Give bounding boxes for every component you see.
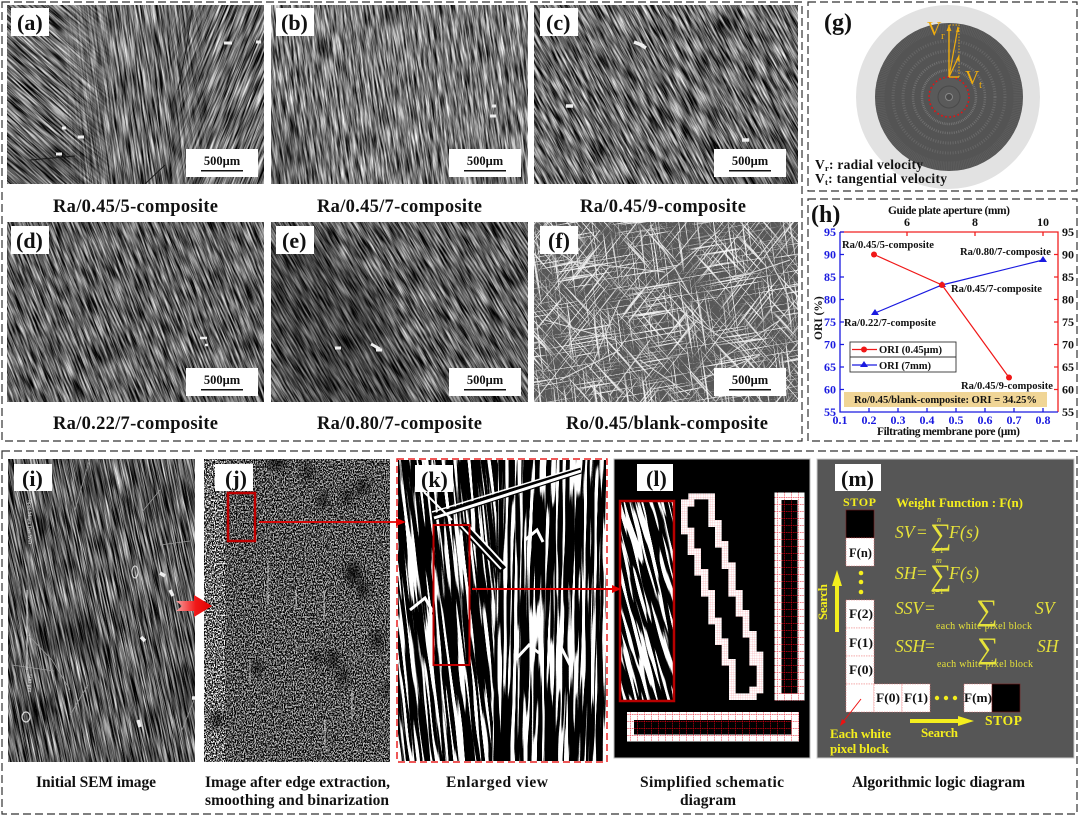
caption (k): Enlarged view — [446, 774, 549, 791]
text: horizontal search: Search — [921, 725, 959, 740]
scale bar (e): 500μm — [467, 373, 504, 387]
equation SV — [895, 515, 979, 555]
horizontal cell row: F(1) — [904, 690, 928, 705]
pixel schematic: vertical fibre — [774, 492, 804, 700]
label (c) — [540, 8, 578, 36]
label (k) — [415, 465, 453, 492]
label (d): (d) — [16, 228, 43, 253]
right axis ticks: 55 — [1062, 405, 1074, 419]
label (c): (c) — [546, 10, 570, 35]
vertical cell stack: F(1) — [849, 635, 873, 650]
caption (l): Simplified schematic — [640, 774, 784, 791]
scale bar (a) — [186, 149, 258, 177]
equation SV: n — [937, 515, 941, 524]
caption (d): Ra/0.22/7-composite — [53, 414, 218, 434]
panel: (g) velocity schematic — [808, 2, 1077, 191]
bottom axis ticks: 0.7 — [1006, 413, 1022, 427]
equation SH: F ( s ) — [948, 563, 979, 583]
label (l) — [637, 464, 673, 491]
label (h): (h) — [811, 202, 840, 228]
scale bar (a): 500μm — [204, 154, 241, 168]
scale bar (c) — [714, 149, 786, 177]
right axis ticks: 80 — [1062, 292, 1074, 306]
caption (c): Ra/0.45/9-composite — [580, 197, 746, 217]
data labels: Ra/0.22/7-composite — [844, 318, 936, 329]
equation SV: SV — [895, 522, 917, 542]
left axis ticks: 60 — [824, 382, 836, 396]
equation SH: m — [936, 556, 942, 565]
caption (m): Algorithmic logic diagram — [852, 774, 1025, 791]
equation SSH: = — [925, 636, 935, 656]
outer light disc — [856, 5, 1040, 189]
equation SV: F ( s ) — [948, 522, 979, 542]
left axis ticks: 65 — [824, 360, 836, 374]
arrow: (k) to (l) — [472, 585, 621, 593]
caption (a): Ra/0.45/5-composite — [53, 197, 218, 217]
left axis ticks: 95 — [824, 225, 836, 239]
bottom axis ticks: 0.2 — [862, 413, 876, 427]
vertical cell stack — [846, 510, 874, 684]
callout: blank composite ORI: Ro/0.45/blank-composite: ORI = 34.25% — [854, 395, 1037, 406]
vertical cell stack: F(2) — [849, 606, 873, 621]
panel: top SEM image group border — [2, 2, 802, 441]
pixel schematic: horizontal fibre — [627, 712, 799, 742]
legend text: : tangential velocity — [828, 171, 947, 186]
caption (j): smoothing and binarization — [205, 792, 389, 809]
caption (l): diagram — [680, 792, 736, 809]
panel: (i) initial SEM image — [8, 459, 195, 762]
label (a) — [11, 8, 49, 36]
right axis ticks: 70 — [1062, 338, 1074, 352]
scale bar (e) — [449, 368, 521, 396]
label (m): (m) — [841, 466, 874, 491]
label (i) — [14, 464, 52, 491]
bottom axis ticks: 0.8 — [1036, 413, 1050, 427]
label Vr: r — [941, 30, 945, 42]
velocity arrows — [946, 25, 960, 77]
pointer arrow — [840, 699, 861, 726]
bottom axis ticks — [832, 413, 1050, 427]
top axis ticks: 8 — [972, 215, 978, 229]
red selection box — [228, 493, 255, 541]
vertical cell stack: F(0) — [849, 662, 873, 677]
equation SSV — [895, 594, 1057, 632]
text: vertical search: Search — [815, 583, 830, 620]
top STOP: STOP — [843, 495, 876, 509]
scale bar (c): 500μm — [732, 154, 769, 168]
right axis ticks: 65 — [1062, 360, 1074, 374]
caption (b): Ra/0.45/7-composite — [317, 197, 482, 217]
text: each white pixel block — [830, 726, 891, 756]
horizontal cell row: F(0) — [876, 690, 900, 705]
label (i): (i) — [22, 466, 43, 491]
arrow: (i) to (j) — [176, 595, 212, 617]
text: each white pixel block: pixel block — [830, 741, 890, 756]
arrow: vertical search — [832, 570, 842, 632]
horizontal cell row — [846, 684, 1020, 712]
panel: SEM image (f) — [534, 222, 798, 402]
equation SH — [895, 556, 979, 596]
panel: (m) algorithm logic diagram — [815, 459, 1074, 758]
bottom axis ticks: 0.4 — [920, 413, 934, 427]
label Vt: V — [965, 67, 980, 89]
bottom axis title: Filtrating membrane pore (μm) — [877, 426, 1020, 438]
right axis ticks: 75 — [1062, 315, 1074, 329]
arrow: horizontal search — [910, 716, 974, 726]
vertical cell stack: F(n) — [849, 545, 872, 560]
panel: SEM image (c) — [534, 5, 798, 184]
data labels — [842, 240, 1053, 392]
equation SSV: each white pixel block — [936, 621, 1032, 632]
red dashed frame — [397, 459, 607, 762]
equation SH: ∑ — [930, 559, 951, 592]
label (e): (e) — [282, 228, 306, 253]
red selection box — [434, 525, 470, 665]
panel: (j) binarised image — [204, 457, 390, 762]
legend text: V — [815, 157, 825, 172]
panel: SEM image (e) — [271, 222, 528, 402]
right axis ticks: 95 — [1062, 225, 1074, 239]
equation SSH: SSH — [895, 636, 926, 656]
label Vt: t — [979, 79, 982, 91]
panel: SEM image (b) — [271, 5, 528, 184]
data labels: Ra/0.45/9-composite — [961, 381, 1053, 392]
legend text — [815, 157, 947, 187]
right axis ticks: 90 — [1062, 248, 1074, 262]
label (j) — [215, 464, 253, 491]
right axis ticks: 60 — [1062, 382, 1074, 396]
scale bar (b): 500μm — [467, 154, 504, 168]
equation SV: ∑ — [930, 518, 951, 551]
horizontal cell row: F(m) — [964, 690, 992, 705]
y axis title: ORI (%) — [813, 296, 825, 340]
scale bar (d): 500μm — [204, 373, 241, 387]
label (l): (l) — [646, 466, 667, 491]
panel: SEM image (d) — [7, 222, 264, 402]
data labels: Ra/0.80/7-composite — [960, 247, 1051, 258]
pixel schematic: diagonal fibre — [681, 493, 763, 700]
bottom axis ticks: 0.6 — [978, 413, 992, 427]
left axis ticks: 80 — [824, 292, 836, 306]
top axis title: Guide plate aperture (mm) — [888, 205, 1010, 217]
panel: (i) initial SEM image: 500 μm — [26, 674, 32, 693]
left axis ticks: 85 — [824, 270, 836, 284]
label (f) — [540, 226, 578, 254]
equation SSV: ∑ — [976, 594, 997, 627]
bottom axis ticks: 0.1 — [832, 413, 848, 427]
callout: blank composite ORI — [844, 392, 1047, 407]
red dotted circle — [929, 77, 969, 117]
legend text: V — [815, 171, 825, 186]
inset enlarged fibres — [618, 500, 676, 702]
legend text: : radial velocity — [829, 157, 923, 172]
legend text: t — [825, 177, 828, 187]
equation SV: = — [917, 522, 927, 542]
left axis ticks: 75 — [824, 315, 836, 329]
data labels: Ra/0.45/5-composite — [842, 240, 934, 251]
label Vr: V — [927, 18, 942, 40]
equation SSV: SV — [1035, 598, 1057, 618]
caption (i): Initial SEM image — [36, 774, 156, 791]
left axis ticks: 55 — [824, 405, 836, 419]
panel: (k) enlarged view — [396, 458, 608, 763]
caption (l) — [640, 774, 784, 809]
label (g): (g) — [824, 10, 852, 36]
equation SV: s=1 — [932, 546, 944, 555]
equation SSH: ∑ — [977, 632, 998, 665]
scale bar (d) — [186, 368, 258, 396]
panel: (i) initial SEM image: Spot Magn Det WD — [26, 500, 32, 544]
caption (f): Ro/0.45/blank-composite — [566, 414, 768, 434]
label (b) — [276, 8, 314, 36]
panel: bottom workflow group border — [2, 451, 1077, 814]
label (f): (f) — [548, 228, 570, 253]
label (e) — [276, 226, 314, 254]
caption (e): Ra/0.80/7-composite — [317, 414, 482, 434]
label (k): (k) — [421, 467, 448, 492]
bottom axis ticks: 0.3 — [890, 413, 906, 427]
heading: weight function: Weight Function : F(n) — [896, 495, 1023, 510]
top axis ticks: 10 — [1037, 215, 1049, 229]
caption (j): Image after edge extraction, — [205, 774, 390, 791]
data labels: Ra/0.45/7-composite — [951, 284, 1042, 295]
series: blue line — [871, 256, 1047, 315]
equation SH: = — [917, 563, 927, 583]
equation SSV: = — [925, 598, 935, 618]
left axis ticks: 90 — [824, 248, 836, 262]
legend: ORI (7mm) — [879, 361, 931, 372]
left axis ticks — [824, 225, 836, 419]
right axis ticks — [1062, 225, 1074, 419]
equation SSH: SH — [1037, 636, 1060, 656]
label (m) — [835, 464, 881, 491]
bottom axis ticks: 0.5 — [948, 413, 964, 427]
equation SSH — [895, 632, 1060, 670]
label (a): (a) — [17, 10, 43, 35]
top axis ticks — [904, 215, 1049, 229]
caption (j) — [205, 774, 390, 809]
panel: (l) simplified schematic — [614, 458, 810, 758]
legend: ORI (0.45μm) — [879, 345, 942, 356]
panel: SEM image (a) — [7, 5, 264, 184]
legend text: r — [825, 163, 829, 173]
text: each white pixel block: Each white — [830, 726, 891, 741]
arrow: (j) to (k) — [259, 518, 406, 526]
scale bar (f) — [714, 368, 786, 396]
equation SH: SH — [895, 563, 918, 583]
top axis ticks: 6 — [904, 215, 910, 229]
right STOP: STOP — [985, 713, 1022, 728]
right axis ticks: 85 — [1062, 270, 1074, 284]
label (d) — [11, 226, 49, 254]
axes — [840, 232, 1058, 412]
left axis ticks: 70 — [824, 338, 836, 352]
series: red line — [871, 252, 1012, 380]
dark textured disc — [875, 23, 1023, 171]
equation SSH: each white pixel block — [937, 659, 1033, 670]
label (b): (b) — [281, 10, 308, 35]
label (j): (j) — [225, 466, 247, 491]
scale bar (f): 500μm — [732, 373, 769, 387]
equation SSV: SSV — [895, 598, 926, 618]
scale bar (b) — [449, 149, 521, 177]
legend — [850, 342, 956, 372]
panel: (h) ORI line chart — [808, 199, 1077, 441]
equation SH: s=1 — [932, 587, 944, 596]
